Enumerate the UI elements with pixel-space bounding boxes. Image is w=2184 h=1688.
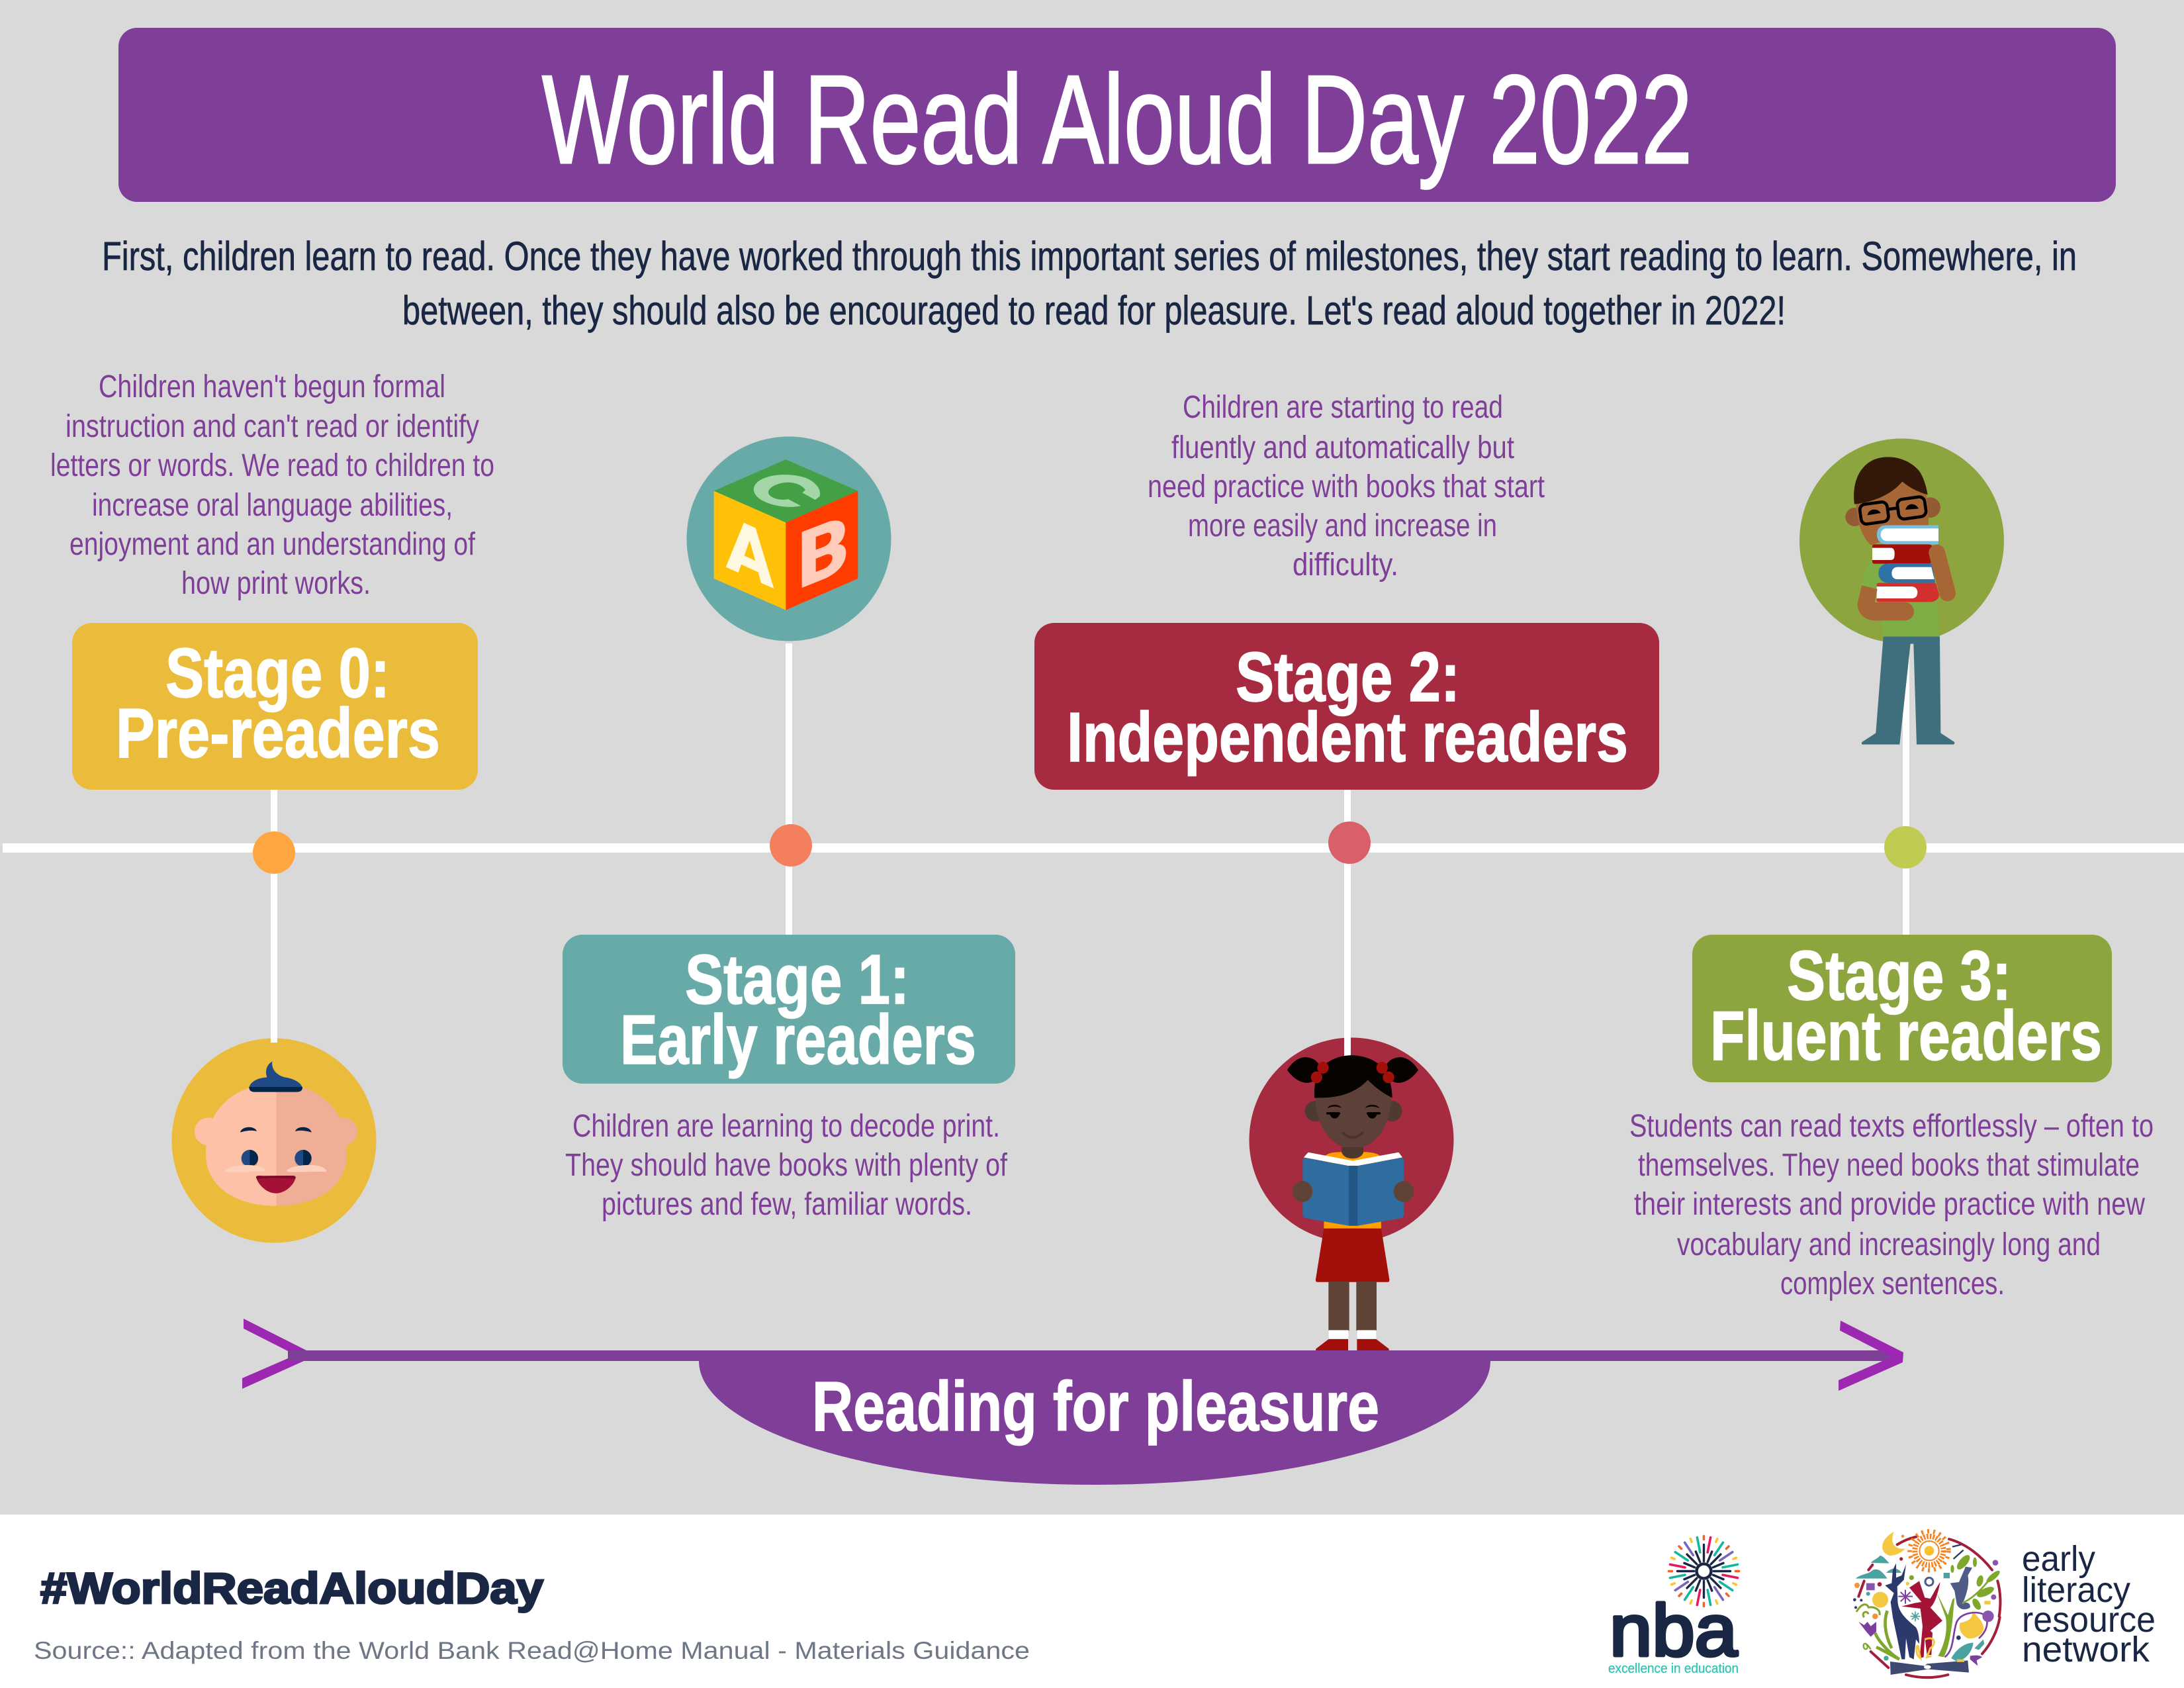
stage 2 icon circle (1250, 1038, 1453, 1242)
intro text (102, 234, 2077, 333)
stage 1 description: pictures and few, familiar words. (602, 1187, 972, 1222)
stage 2 connector (1344, 790, 1351, 1056)
arrow: reading for pleasure left head (242, 1319, 306, 1389)
icon: girl reading (1287, 1055, 1418, 1351)
stage 3 timeline dot (1884, 826, 1927, 868)
logo: nba: nba (1610, 1590, 1738, 1671)
stage 0 description: how print works. (181, 566, 371, 601)
reading for pleasure banner (699, 1350, 1490, 1485)
stage 1 heading box: Early readers (620, 1001, 976, 1079)
stage 1 description: They should have books with plenty of (565, 1148, 1008, 1183)
stage 0 description: increase oral language abilities, (92, 488, 453, 523)
stage 2 heading box (1034, 623, 1659, 790)
logo: early literacy resource network: resource (2022, 1600, 2156, 1640)
stage 2 description (1148, 390, 1545, 583)
logo: early literacy resource network: literacy (2022, 1570, 2130, 1610)
stage 0 heading box (72, 623, 478, 790)
icon: baby face (195, 1061, 357, 1206)
stage 2 description: Children are starting to read (1183, 390, 1503, 425)
stage 2 description: difficulty. (1293, 547, 1398, 583)
stage 1 heading box: Stage 1: (685, 941, 909, 1019)
stage 3 description: complex sentences. (1780, 1266, 2005, 1301)
stage 2 description: need practice with books that start (1148, 469, 1545, 504)
stage 1 heading box (563, 935, 1015, 1084)
stage 0 connector (271, 790, 277, 1043)
timeline axis (3, 843, 2184, 853)
stage 3 heading box: Fluent readers (1710, 997, 2102, 1075)
stage 0 heading box: Stage 0: (165, 634, 390, 712)
stage 1 connector (786, 643, 792, 935)
icon: boy with book stack (1845, 457, 1954, 745)
stage 0 icon circle (172, 1038, 376, 1243)
source line: Source:: Adapted from the World Bank Read@Home Manual - Materials Guidance (34, 1637, 1030, 1664)
intro text: between, they should also be encouraged to read for pleasure. Let's read aloud together in 2022! (402, 288, 1786, 333)
title banner: World Read Aloud Day 2022 (542, 50, 1692, 190)
stage 0 description: letters or words. We read to children to (50, 448, 494, 483)
stage 3 heading box (1692, 935, 2112, 1082)
stage 2 description: fluently and automatically but (1171, 430, 1514, 465)
arrow: reading for pleasure shaft (288, 1350, 1896, 1361)
logo: nba: excellence in education (1608, 1662, 1739, 1676)
stage 0 description: instruction and can't read or identify (66, 409, 479, 444)
stage 2 heading box: Stage 2: (1236, 638, 1460, 716)
reading for pleasure banner: Reading for pleasure (812, 1368, 1379, 1446)
stage 3 icon circle (1799, 438, 2004, 643)
stage 3 description (1629, 1109, 2154, 1301)
title banner (118, 28, 2116, 202)
hashtag: #WorldReadAloudDay (40, 1564, 543, 1613)
logo: early literacy resource network (1853, 1531, 2156, 1677)
stage 0 description (50, 369, 494, 601)
logo: nba (1608, 1536, 1739, 1676)
stage 2 description: more easily and increase in (1188, 508, 1497, 543)
stage 1 description (565, 1109, 1008, 1222)
stage 0 description: Children haven't begun formal (99, 369, 445, 404)
stage 0 timeline dot (253, 831, 295, 874)
stage 1 icon circle (687, 437, 891, 641)
stage 3 heading box: Stage 3: (1787, 937, 2011, 1015)
stage 2 heading box: Independent readers (1067, 698, 1628, 776)
logo: early literacy resource network: early (2022, 1539, 2095, 1579)
stage 0 heading box: Pre-readers (116, 694, 440, 773)
stage 1 description: Children are learning to decode print. (572, 1109, 1000, 1144)
stage 0 description: enjoyment and an understanding of (69, 527, 476, 562)
stage 3 connector (1903, 644, 1909, 935)
stage 2 timeline dot (1328, 821, 1371, 864)
logo: early literacy resource network: network (2022, 1630, 2150, 1669)
icon: alphabet block (714, 459, 858, 610)
stage 1 timeline dot (770, 824, 812, 867)
arrow: reading for pleasure right head (1839, 1321, 1903, 1391)
footer band (0, 1515, 2184, 1688)
